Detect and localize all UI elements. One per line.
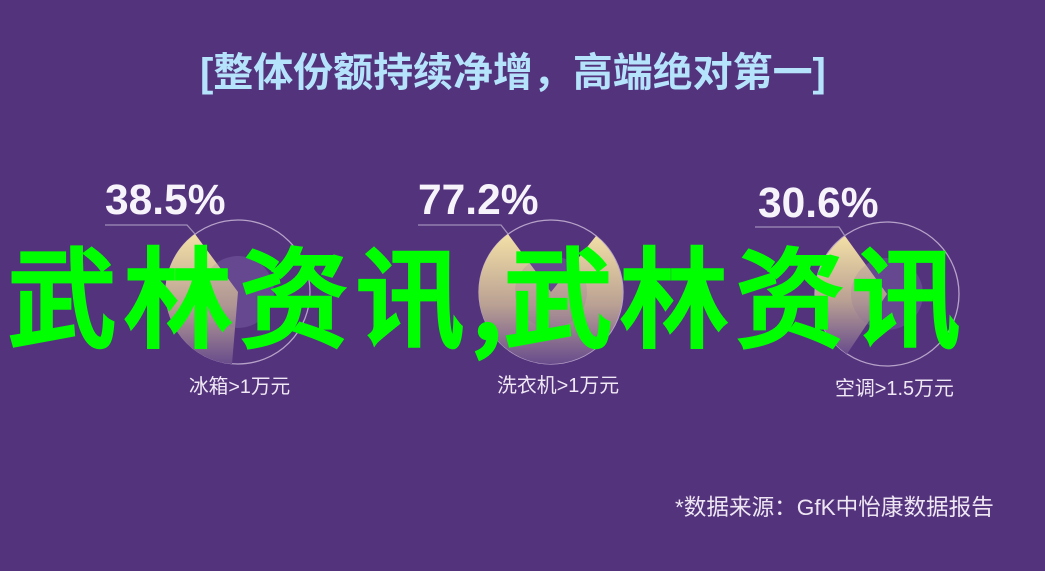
label: refrigerator: 冰箱>1万元 xyxy=(189,376,290,398)
value: 30.6%: 30.6% xyxy=(758,180,879,227)
source note: *数据来源：GfK中怡康数据报告 xyxy=(675,495,994,520)
pie chart: refrigerator 38.5% xyxy=(105,220,310,364)
watermark overlay text: 武林资讯,武林资讯 xyxy=(8,214,968,370)
title: [整体份额持续净增，高端绝对第一] xyxy=(200,51,826,95)
value: 38.5%: 38.5% xyxy=(105,177,226,224)
value: 77.2%: 77.2% xyxy=(418,177,539,224)
pie chart: air conditioner 30.6% xyxy=(755,222,959,366)
label: air conditioner: 空调>1.5万元 xyxy=(835,378,954,400)
pie chart: washing machine 77.2% xyxy=(418,220,623,364)
label: washing machine: 洗衣机>1万元 xyxy=(497,375,619,397)
